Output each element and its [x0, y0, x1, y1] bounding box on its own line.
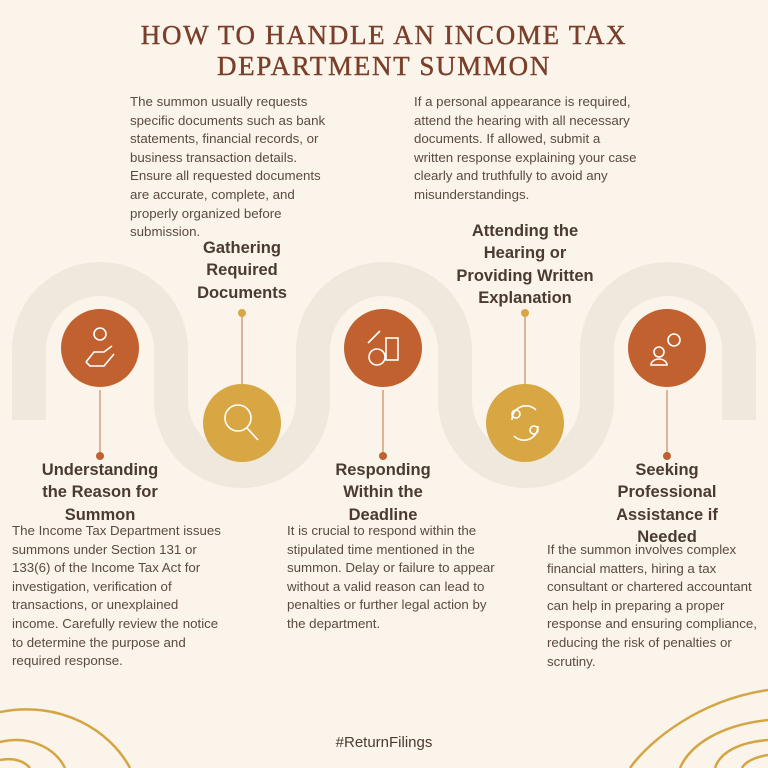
text: responding: It is crucial to respond within the stipulated time mentioned in the summon. Delay or failure to appear without a valid reason can lead to penalties or further legal action by the department. — [287, 523, 495, 631]
title — [141, 20, 627, 81]
title: DEPARTMENT SUMMON — [217, 51, 551, 81]
text: hearing: If a personal appearance is required, attend the hearing with all necessary documents. If allowed, submit a written response explaining your case clearly and truthfully to avoid any misunderstandings. — [414, 94, 636, 202]
text: seeking: If the summon involves complex financial matters, hiring a tax consultant or chartered accountant can help in preparing a proper response and ensuring compliance, reducing the risk of penalties or scrutiny. — [547, 542, 757, 669]
text: gathering: The summon usually requests specific documents such as bank statements, financial records, or business transaction details. Ensure all requested documents are accurate, complete, and properly organized before submission. — [130, 94, 325, 239]
heading: understanding: Understanding the Reason for Summon — [42, 461, 158, 524]
footer: #ReturnFilings — [336, 734, 432, 751]
heading: gathering: Gathering Required Documents — [197, 239, 287, 302]
heading: hearing: Attending the Hearing or Providing Written Explanation — [456, 222, 594, 307]
connectors — [100, 313, 667, 456]
heading: responding: Responding Within the Deadline — [335, 461, 431, 524]
text: understanding: The Income Tax Department issues summons under Section 131 or 133(6) of the Income Tax Act for investigation, verification of transactions, or unexplained income. Carefully review the notice to determine the purpose and required response. — [12, 523, 221, 668]
icon circles — [61, 309, 706, 387]
title: HOW TO HANDLE AN INCOME TAX — [141, 20, 627, 50]
heading: seeking: Seeking Professional Assistance if Needed — [616, 461, 718, 546]
